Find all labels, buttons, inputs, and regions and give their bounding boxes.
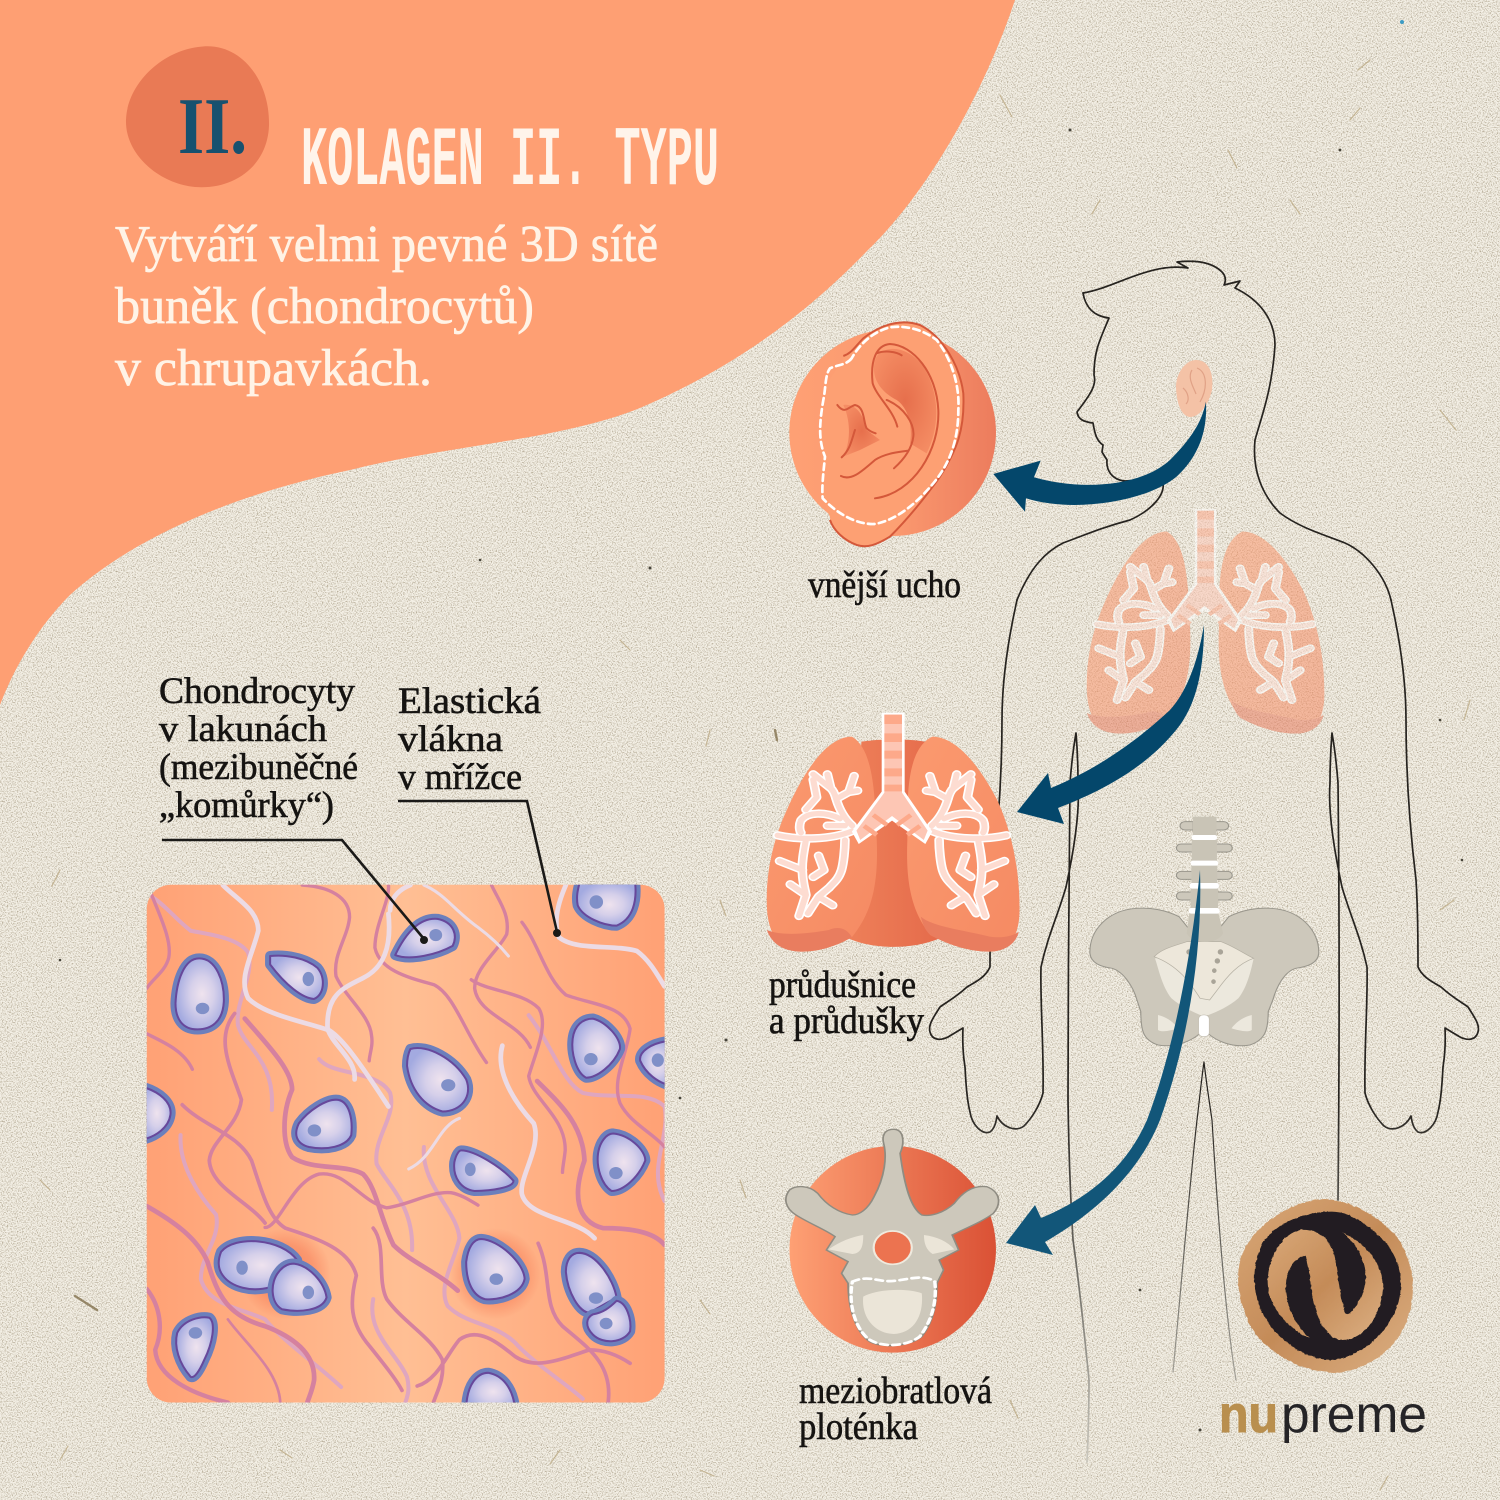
arrow: disc (1006, 870, 1200, 1255)
callout: chondrocytes (159, 671, 428, 944)
label: disc: meziobratlová (799, 1370, 992, 1412)
logo wordmark: nupreme (1219, 1386, 1427, 1444)
ear illustration (789, 322, 996, 546)
title: KOLAGEN II. TYPU (301, 115, 719, 210)
ear inner folds (837, 344, 938, 498)
human body outline (930, 261, 1478, 1462)
callout: chondrocytes: v lakunách (159, 709, 328, 750)
bronchi lungs illustration (767, 713, 1020, 952)
badge: II. (126, 46, 269, 187)
logo wordmark: nupreme: preme (1281, 1386, 1427, 1444)
label: outer ear: vnější ucho (808, 564, 961, 606)
label: disc: ploténka (799, 1406, 918, 1448)
pelvis bones (1090, 908, 1319, 1046)
callout: elastic fibres (398, 681, 561, 937)
dashed cartilage outline (820, 327, 958, 524)
badge: II.: II. (178, 83, 247, 171)
ghost lungs in body (1087, 509, 1324, 734)
callout: elastic fibres: vlákna (398, 719, 503, 760)
logo wordmark: nupreme: nu (1219, 1386, 1278, 1444)
cartilage tissue panel (140, 883, 672, 1411)
label: disc (799, 1370, 992, 1448)
label: bronchi: a průdušky (769, 1000, 924, 1042)
callout: elastic fibres: v mřížce (398, 757, 522, 798)
arrow: lungs (1017, 625, 1204, 824)
callout: chondrocytes: (mezibuněčné (159, 747, 358, 788)
intro text (115, 216, 658, 397)
intro text: buněk (chondrocytů) (115, 278, 534, 335)
intro text: Vytváří velmi pevné 3D sítě (115, 216, 658, 273)
vertebra illustration (786, 1129, 999, 1353)
intro text: v chrupavkách. (115, 340, 432, 397)
lumbar spine (1176, 817, 1232, 942)
callout: chondrocytes: Chondrocyty (159, 671, 356, 712)
label: bronchi (769, 964, 924, 1042)
small ear on body (1176, 360, 1212, 417)
label: bronchi: průdušnice (769, 964, 916, 1006)
callout: elastic fibres: Elastická (398, 681, 541, 722)
arrow: ear (993, 402, 1206, 512)
spine and pelvis (1090, 817, 1319, 1046)
chondrocyte cells (140, 883, 672, 1411)
fibres (147, 885, 666, 1403)
heading panel: orange wave (0, 0, 1015, 705)
callout: chondrocytes: „komůrky“) (159, 785, 334, 826)
logo: nupreme mark (1238, 1199, 1413, 1372)
